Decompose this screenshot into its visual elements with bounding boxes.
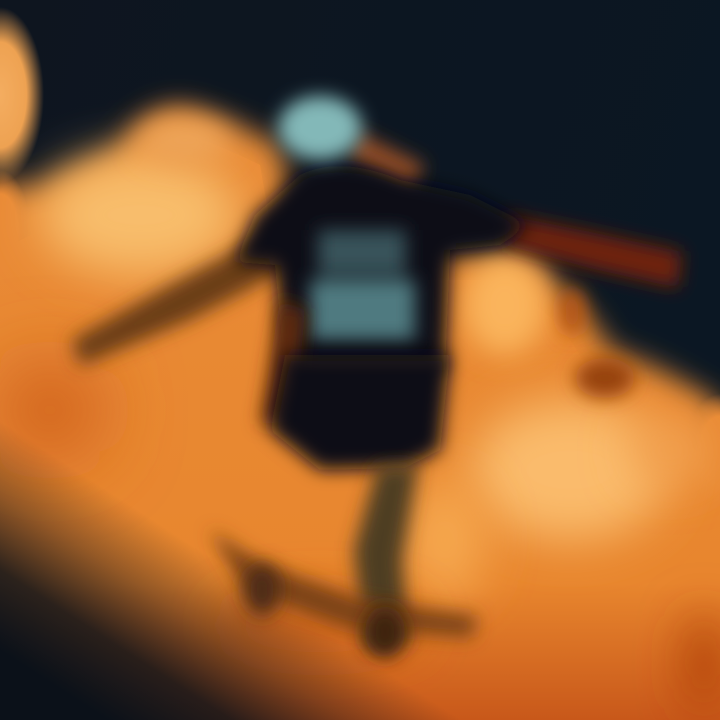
upper-left lobe: [0, 7, 44, 183]
shade: red-orange left edge: [0, 365, 100, 455]
left edge fill: [0, 170, 30, 290]
skateboard deck: [210, 530, 478, 638]
highlight: left cloud: [40, 155, 240, 275]
right arm: [505, 215, 682, 288]
skateboard front wheels: [365, 606, 405, 658]
dark foreground bottom-left: [0, 400, 720, 720]
forearm at head: [350, 130, 425, 192]
shade: reddish below board: [220, 597, 420, 653]
torso and sleeves: [235, 166, 530, 370]
legs: [354, 465, 418, 650]
highlight: far right: [630, 420, 710, 480]
highlight: right cloud top: [463, 255, 547, 355]
highlight: right cloud centre: [470, 400, 670, 540]
highlight: cloud crown: [140, 118, 230, 162]
helmet: [278, 96, 362, 160]
left arm: [72, 235, 285, 366]
shade: cloud dimple right: [575, 358, 635, 398]
near hip arm shade: [260, 300, 305, 425]
skateboarder figure: [72, 96, 682, 658]
skateboard rear wheels: [244, 564, 280, 616]
highlight: centre beneath figure: [405, 480, 485, 600]
shade: lower right red: [688, 612, 720, 712]
shorts: [270, 355, 450, 470]
shirt print: [310, 230, 415, 340]
right edge fill: [686, 394, 720, 506]
